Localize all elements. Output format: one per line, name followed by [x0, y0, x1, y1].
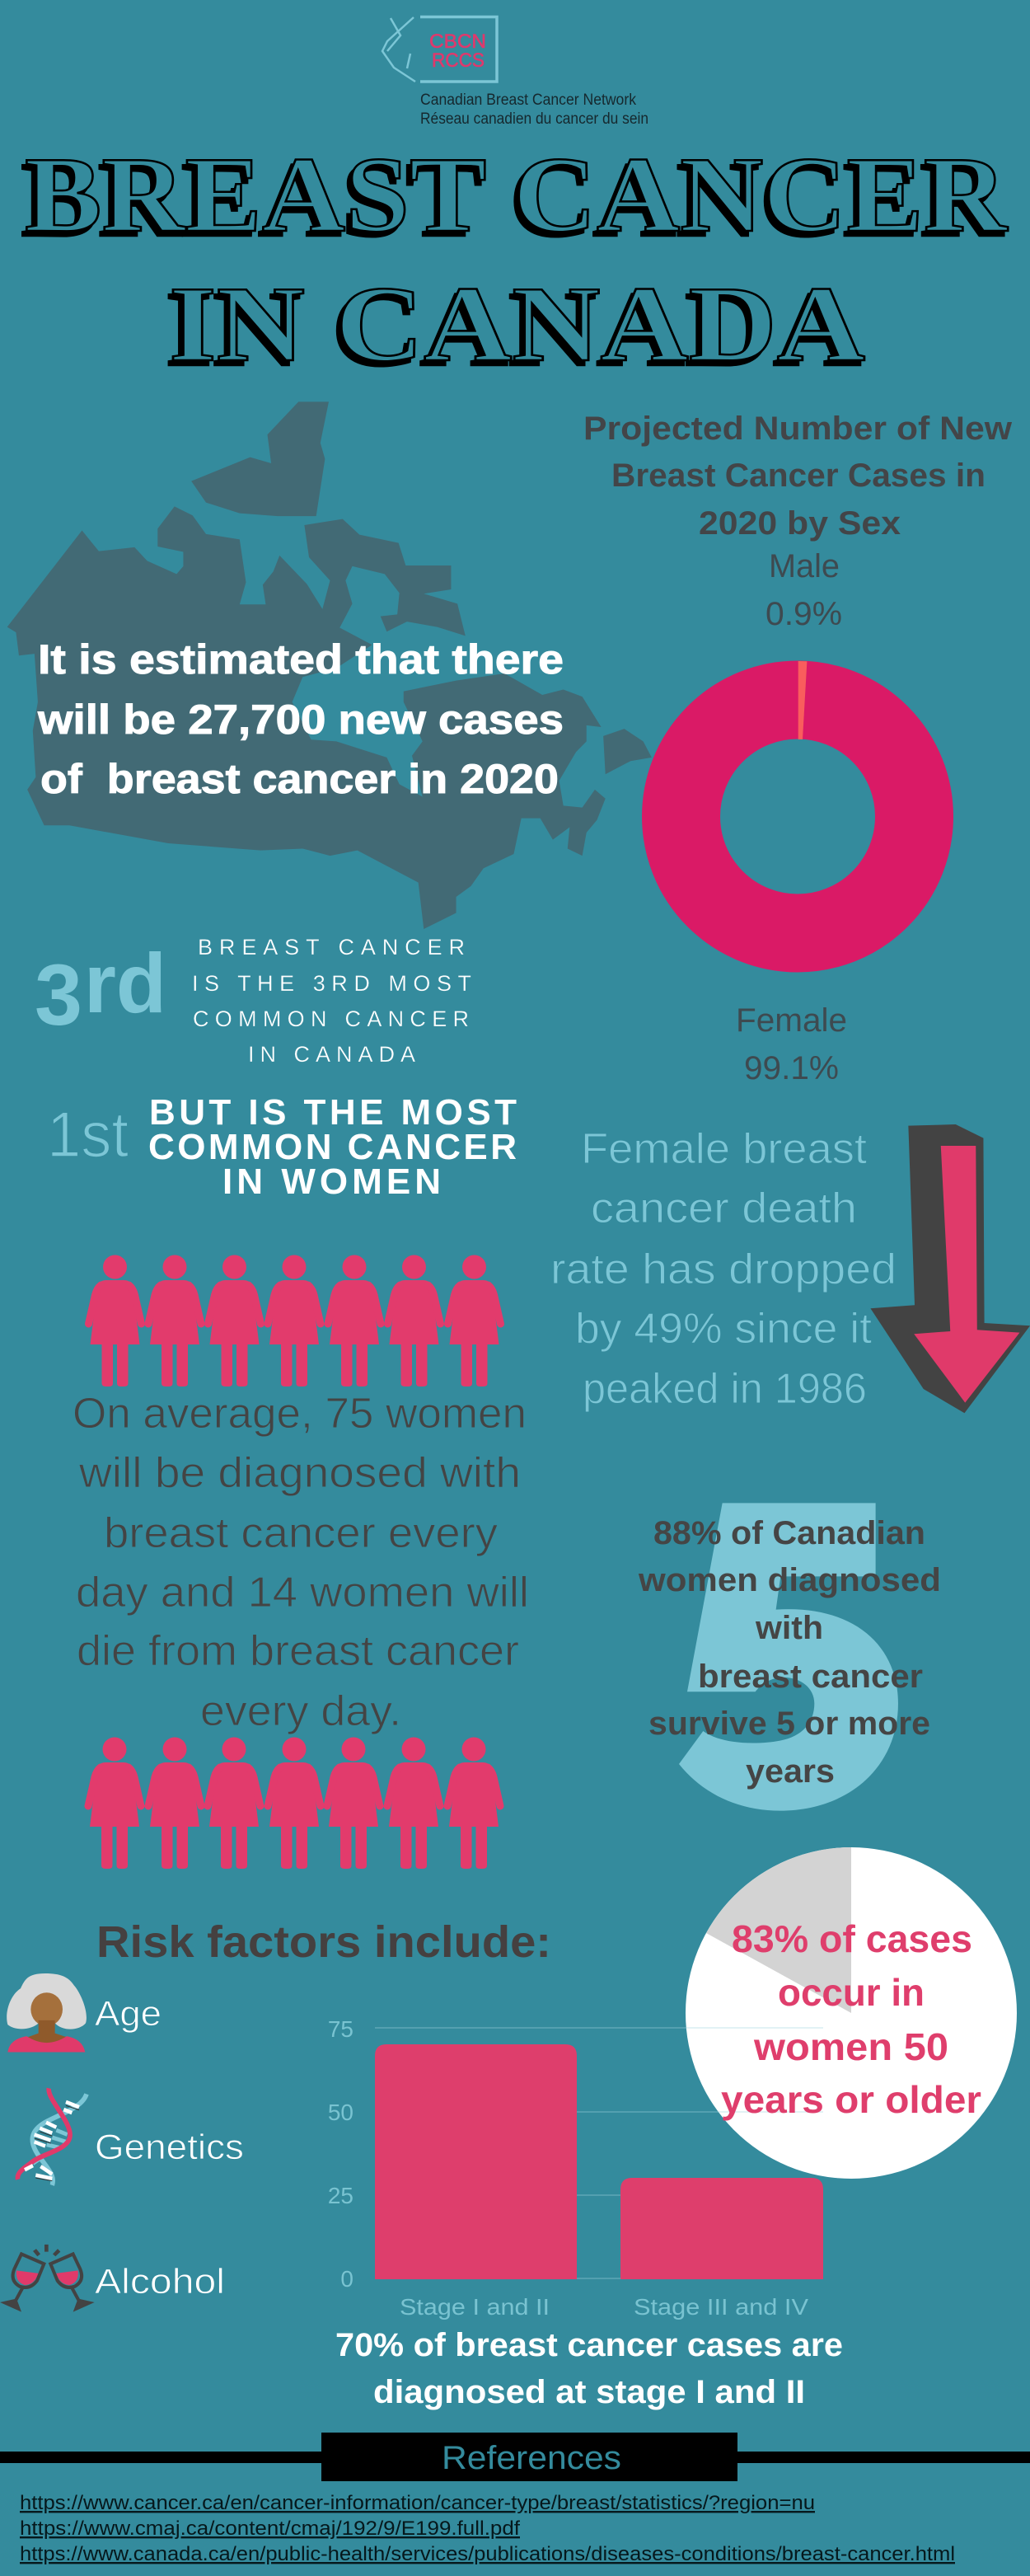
- bar chart: stage at diagnosis: 50: [328, 2100, 353, 2125]
- daily diagnoses text: [73, 1390, 529, 1735]
- most common in women text: IN WOMEN: [222, 1161, 441, 1202]
- daily diagnoses text: will be diagnosed with: [78, 1449, 521, 1497]
- heading: projected new cases: 2020 by Sex: [699, 505, 901, 542]
- survival text: breast cancer: [698, 1659, 923, 1695]
- bar chart caption: 70% of breast cancer cases are: [335, 2327, 843, 2363]
- pie caption: years or older: [721, 2078, 981, 2121]
- daily diagnoses text: breast cancer every: [104, 1509, 498, 1557]
- donut chart: Male: [769, 548, 840, 584]
- 3rd most common text: COMMON CANCER: [193, 1006, 469, 1031]
- donut chart: Female: [736, 1002, 847, 1039]
- title: IN CANADA: [165, 270, 861, 389]
- bar chart: stage at diagnosis: Stage III and IV: [634, 2294, 808, 2320]
- references band: [0, 2433, 1030, 2481]
- map of Canada: [7, 401, 652, 929]
- daily diagnoses text: day and 14 women will: [76, 1569, 529, 1616]
- donut chart: 99.1%: [744, 1050, 839, 1086]
- reference links: [20, 2492, 955, 2565]
- heading: projected new cases: [583, 411, 1013, 542]
- death rate text: rate has dropped: [550, 1246, 897, 1293]
- 3rd most common text: IS THE 3RD MOST: [192, 971, 471, 996]
- 3rd most common text: BREAST CANCER: [198, 935, 465, 960]
- daily diagnoses text: die from breast cancer: [77, 1627, 519, 1675]
- donut chart: [681, 548, 915, 1086]
- death rate text: peaked in 1986: [583, 1365, 867, 1413]
- pie caption: 83% of cases: [732, 1917, 972, 1960]
- survival text: with: [755, 1610, 823, 1646]
- logo: CBCN: Réseau canadien du cancer du sein: [420, 110, 648, 128]
- label: Alcohol: Alcohol: [95, 2262, 225, 2302]
- death rate text: [550, 1125, 897, 1413]
- title: BREAST CANCER: [21, 140, 1004, 260]
- pie caption: [721, 1917, 981, 2121]
- bar chart: stage at diagnosis: 25: [328, 2183, 353, 2208]
- label: Genetics: Genetics: [95, 2128, 244, 2167]
- survival text: survive 5 or more: [648, 1706, 930, 1742]
- reference links: https://www.canada.ca/en/public-health/services/publications/diseases-conditions/breast-cancer.html: [20, 2543, 955, 2565]
- risk factors heading: Risk factors include:: [96, 1917, 551, 1967]
- logo: CBCN: RCCS: [432, 49, 485, 72]
- icon: wine glasses: [0, 2245, 95, 2312]
- 3rd label: 3: [35, 947, 82, 1044]
- survival text: 88% of Canadian: [653, 1515, 925, 1551]
- heading: projected new cases: Projected Number of New: [583, 411, 1013, 447]
- women icons row 1: [89, 1255, 501, 1387]
- estimate text: It is estimated that there: [38, 636, 564, 683]
- survival text: years: [746, 1753, 835, 1790]
- arrow: decline: [870, 1124, 1030, 1413]
- icon: DNA helix: [17, 2088, 87, 2185]
- death rate text: Female breast: [581, 1125, 868, 1173]
- title: IN CANADA: [169, 265, 865, 384]
- bar chart: stage at diagnosis: 75: [328, 2016, 353, 2042]
- references band: References: [442, 2440, 621, 2476]
- estimate text: of breast cancer in 2020: [40, 756, 559, 802]
- 3rd label: rd: [84, 936, 166, 1030]
- bar chart caption: [335, 2327, 843, 2410]
- reference links: https://www.cancer.ca/en/cancer-information/cancer-type/breast/statistics/?region=nu: [20, 2492, 815, 2514]
- death rate text: by 49% since it: [575, 1305, 873, 1353]
- most common in women text: BUT IS THE MOST: [149, 1092, 517, 1133]
- reference links: https://www.cmaj.ca/content/cmaj/192/9/E199.full.pdf: [20, 2517, 520, 2540]
- big numeral 5: [679, 1503, 898, 1811]
- 3rd most common text: [192, 935, 471, 1067]
- bar chart: stage at diagnosis: [328, 2016, 823, 2320]
- title: [21, 135, 1008, 389]
- title: BREAST CANCER: [25, 135, 1008, 255]
- logo: CBCN: Canadian Breast Cancer Network: [420, 91, 636, 109]
- 1st label: 1st: [47, 1098, 129, 1171]
- death rate text: cancer death: [591, 1185, 857, 1232]
- logo: CBCN: [382, 16, 648, 128]
- daily diagnoses text: On average, 75 women: [73, 1390, 527, 1438]
- survival text: women diagnosed: [638, 1562, 941, 1598]
- estimate text: will be 27,700 new cases: [37, 697, 564, 743]
- pie caption: women 50: [753, 2025, 948, 2068]
- survival text: [638, 1515, 941, 1790]
- daily diagnoses text: every day.: [200, 1687, 401, 1735]
- bar chart caption: diagnosed at stage I and II: [373, 2374, 805, 2410]
- bar chart: stage at diagnosis: Stage I and II: [400, 2294, 550, 2320]
- heading: projected new cases: Breast Cancer Cases in: [611, 457, 986, 494]
- pie caption: occur in: [778, 1971, 925, 2014]
- most common in women text: [148, 1092, 517, 1202]
- logo: CBCN: CBCN: [429, 30, 486, 53]
- icon: older woman: [7, 1973, 87, 2052]
- bar chart: stage at diagnosis: 0: [340, 2266, 353, 2292]
- most common in women text: COMMON CANCER: [148, 1127, 517, 1167]
- 3rd label: [35, 936, 166, 1044]
- women icons row 2: [88, 1738, 500, 1869]
- donut chart: 0.9%: [765, 596, 842, 632]
- estimate text: [37, 636, 564, 802]
- 3rd most common text: IN CANADA: [248, 1042, 415, 1067]
- label: Age: Age: [95, 1994, 162, 2034]
- pie: 83 percent: [686, 1847, 1017, 2179]
